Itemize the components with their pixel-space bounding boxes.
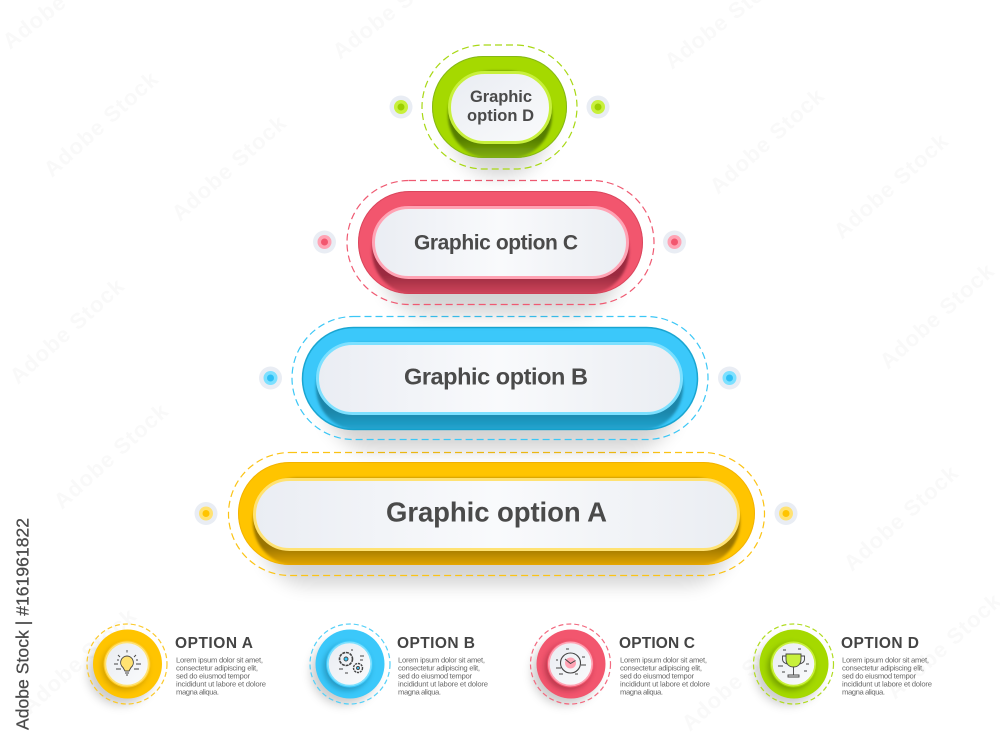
tier C outer pill <box>358 191 643 295</box>
description C: Lorem ipsum dolor sit amet, <box>620 656 707 664</box>
legend item: Option B <box>310 624 488 705</box>
tier C dashed outline <box>347 180 654 304</box>
description A: incididunt ut labore et dolore <box>176 680 266 688</box>
watermark pattern: Adobe Stock <box>839 460 963 576</box>
description D: consectetur adipiscing elit, <box>842 664 924 672</box>
description A: Lorem ipsum dolor sit amet, <box>176 656 263 664</box>
description B: sed do eiusmod tempor <box>398 672 472 680</box>
description D: sed do eiusmod tempor <box>842 672 916 680</box>
legend item: Option D <box>754 624 932 705</box>
tier A outer pill <box>238 462 755 566</box>
tier C inner pill <box>374 208 628 278</box>
description C: incididunt ut labore et dolore <box>620 680 710 688</box>
description D: magna aliqua. <box>842 688 885 696</box>
icon: light bulb <box>114 650 141 675</box>
tier A: Graphic option A <box>194 452 798 585</box>
badge A <box>87 624 167 705</box>
watermark pattern: Adobe Stock <box>875 258 999 374</box>
tier D right dot <box>586 96 610 118</box>
tier A left dot <box>194 502 218 525</box>
tier D label: Graphic <box>470 88 532 106</box>
tier C shadow <box>382 219 620 314</box>
tier A inner pill <box>254 480 738 550</box>
tier D: Graphic option D <box>390 45 610 176</box>
description A: consectetur adipiscing elit, <box>176 664 258 672</box>
description A: magna aliqua. <box>176 688 219 696</box>
tier B left dot <box>259 366 282 390</box>
tier D dashed outline <box>422 45 577 169</box>
description B: Lorem ipsum dolor sit amet, <box>398 656 485 664</box>
tier B: Graphic option B <box>259 316 741 450</box>
watermark pattern: Adobe Stock <box>829 128 953 244</box>
description B: consectetur adipiscing elit, <box>398 664 480 672</box>
heading: Option B: OPTION B <box>397 635 475 652</box>
badge D <box>754 624 834 705</box>
tier D left dot <box>390 96 412 118</box>
description C: sed do eiusmod tempor <box>620 672 694 680</box>
tier D shadow <box>452 84 548 176</box>
tier A right dot <box>774 502 798 525</box>
icon: gears <box>339 650 364 673</box>
tier D outer pill <box>432 56 567 159</box>
tier C right dot <box>663 230 686 254</box>
tier B outer pill <box>302 327 698 431</box>
tier D inner pill <box>450 72 550 142</box>
tier B label: Graphic option B <box>404 364 588 390</box>
watermark pattern: Adobe Stock <box>49 398 173 514</box>
tier B dashed outline <box>292 316 708 440</box>
description A: sed do eiusmod tempor <box>176 672 250 680</box>
description C: consectetur adipiscing elit, <box>620 664 702 672</box>
watermark pattern: Adobe Stock <box>167 110 291 226</box>
tier C: Graphic option C <box>313 180 686 314</box>
badge B <box>310 624 390 705</box>
legend item: Option A <box>87 624 266 705</box>
tier A label: Graphic option A <box>386 496 607 528</box>
tier A shadow <box>262 490 732 585</box>
icon: clock <box>556 649 586 674</box>
tier C label: Graphic option C <box>414 232 578 254</box>
tier B inner pill <box>318 344 682 414</box>
watermark pattern: Adobe Stock <box>39 66 163 182</box>
tier C left dot <box>313 230 336 254</box>
description B: magna aliqua. <box>398 688 441 696</box>
description D: incididunt ut labore et dolore <box>842 680 932 688</box>
watermark pattern: Adobe Stock <box>705 83 829 199</box>
watermark pattern: Adobe Stock <box>5 273 129 389</box>
tier D label: option D <box>467 107 534 125</box>
tier B shadow <box>326 355 676 450</box>
icon: trophy <box>778 649 809 677</box>
description D: Lorem ipsum dolor sit amet, <box>842 656 929 664</box>
badge C <box>530 624 610 705</box>
watermark pattern: Adobe Stock <box>677 620 801 736</box>
heading: Option C: OPTION C <box>619 635 695 652</box>
tier B right dot <box>718 366 741 390</box>
description B: incididunt ut labore et dolore <box>398 680 488 688</box>
stock credit: Adobe Stock | #161961822 <box>12 518 32 730</box>
watermark pattern: Adobe Stock <box>17 603 141 719</box>
heading: Option A: OPTION A <box>175 635 253 652</box>
tier A dashed outline <box>228 452 764 576</box>
legend item: Option C <box>530 624 710 705</box>
heading: Option D: OPTION D <box>841 635 919 652</box>
description C: magna aliqua. <box>620 688 663 696</box>
